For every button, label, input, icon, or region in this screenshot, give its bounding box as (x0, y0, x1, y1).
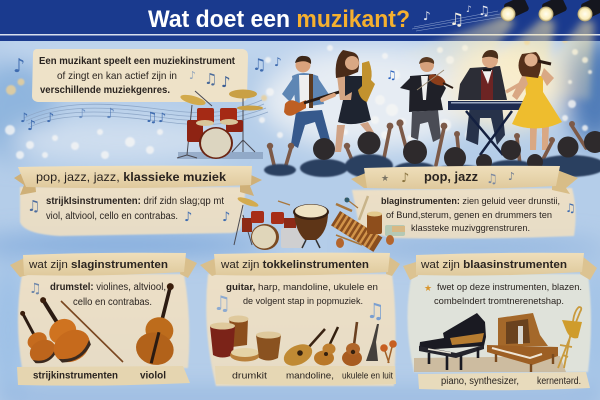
header music notes: ♫ (478, 4, 490, 19)
staff notes: ♪ (106, 106, 115, 122)
note: ♫ (29, 281, 42, 297)
heading: wat zijn slaginstrumenten (28, 259, 168, 271)
ribbon (14, 168, 262, 196)
panel: blaasinstrumenten (403, 253, 597, 390)
staff notes: ♪ (13, 55, 25, 77)
bow (61, 301, 123, 362)
crowd heads (313, 131, 600, 170)
mandoline (280, 329, 325, 370)
panel: strings intro: viol, altviool, cello en contrabas. (46, 211, 178, 222)
panel: winds intro (351, 166, 578, 239)
panel: blaasinstrumenten: kernentərd. (537, 376, 581, 387)
panel: tokkelinstrumenten: ♫ (366, 299, 385, 323)
guitar (342, 322, 362, 366)
musician: violinist (400, 57, 453, 142)
raised hands (267, 119, 575, 149)
ribbon heading: pop, jazz, jazz, klassieke muziek (36, 170, 226, 184)
harpsichord organ (487, 313, 558, 372)
body copy: drumstel: violines, altviool, (50, 282, 166, 293)
captions: strijkinstrumenten (33, 370, 118, 382)
title: Wat doet een muzikant? (148, 6, 410, 33)
ribbon (200, 256, 400, 276)
musician: keyboardist (448, 50, 529, 155)
panel: tokkelinstrumenten (200, 253, 400, 386)
panel: slaginstrumenten: cello en contrabas. (73, 297, 152, 308)
panel: blaasinstrumenten: combelndert tromtnerenetshap. (434, 296, 564, 307)
ribbon ornaments: ♪ (401, 171, 409, 186)
faded notes: ♫ (213, 291, 231, 315)
musician: guitarist (282, 56, 352, 150)
timpani (293, 204, 329, 248)
lute (366, 324, 379, 361)
header music notes: ♪ (423, 9, 431, 23)
ribbon ornaments (381, 170, 515, 187)
floor shade (414, 356, 566, 372)
star: ★ (424, 284, 432, 294)
intro text panel: Een muzikant speelt een muziekinstrument (39, 56, 236, 67)
body paper (20, 187, 246, 236)
intro text panel: ♪ (221, 73, 231, 91)
drum kit on stage (177, 90, 263, 159)
header music notes (412, 4, 502, 31)
captions: piano, synthesizer, (441, 376, 519, 387)
body paper (407, 274, 591, 372)
ukulele (314, 327, 338, 366)
stage light beams (400, 16, 594, 110)
captions: drumkit (232, 370, 267, 382)
hand drums (210, 316, 281, 362)
small notes: ♪ (184, 210, 192, 225)
audience (264, 119, 600, 179)
small violin (10, 305, 60, 367)
body paper (206, 274, 396, 386)
panel: tokkelinstrumenten: de volgent stap in popmuziek. (243, 296, 363, 307)
bottom caption strip (17, 366, 190, 386)
musician: saxophonist (335, 50, 376, 152)
body copy: strijkIsinstrumenten: drif zidn slag;qp mt (46, 196, 224, 207)
drums (234, 195, 304, 250)
body paper (352, 188, 576, 239)
header music notes: ♫ (449, 10, 464, 30)
ribbon (403, 256, 597, 280)
crowd shoulders (264, 154, 600, 179)
trombone (558, 307, 581, 368)
musician: singer (512, 52, 562, 150)
body copy: fwet op deze instrumenten, blazen. (437, 282, 582, 293)
ochre dots (6, 37, 568, 101)
cello (133, 279, 190, 369)
maracas (380, 340, 397, 363)
ribbon heading: pop, jazz (424, 170, 478, 184)
note icon: ♫ (565, 201, 576, 215)
mallets and flute (278, 196, 368, 245)
bottom caption strip (418, 372, 590, 390)
staff notes: ♪ (27, 118, 36, 134)
ribbon ornaments: ♪ (508, 170, 515, 183)
grand piano (419, 313, 486, 370)
heading: wat zijn blaasinstrumenten (420, 259, 567, 271)
body copy: guitar, harp, mandoline, ukulele en (226, 282, 378, 293)
header music notes: ♪ (466, 5, 472, 15)
centre percussion group (234, 195, 405, 252)
header bar (0, 0, 600, 41)
staff notes: ♫ (145, 110, 158, 126)
staff notes: ♪ (274, 55, 282, 69)
intro text panel: of zingt en kan actief zijn in (57, 71, 177, 82)
staff notes: ♫ (252, 55, 266, 74)
panel: slaginstrumenten (10, 253, 197, 386)
large violin (25, 288, 96, 369)
staff notes (13, 55, 397, 134)
ribbon ornaments: ★ (381, 174, 389, 184)
staff notes: ♪ (158, 111, 166, 126)
panel: slaginstrumenten: violol (140, 370, 166, 382)
panel: strings intro (14, 166, 262, 236)
heading: wat zijn tokkelinstrumenten (220, 259, 369, 271)
panel: winds intro: of Bund,sterum, genen en drummers ten (386, 210, 552, 221)
intro text panel: ♫ (204, 70, 217, 88)
panel: tokkelinstrumenten: mandoline, (286, 370, 334, 382)
panel: tokkelinstrumenten: ukulele en luit (342, 370, 393, 382)
ribbon (351, 168, 578, 194)
panel: strings intro: ♪ (222, 210, 230, 225)
brass bell (562, 320, 582, 338)
music staff ribbon (24, 100, 268, 127)
staff notes: ♪ (20, 111, 28, 126)
staff notes: ♫ (386, 68, 397, 82)
intro text panel: verschillende muziekgenres. (40, 85, 170, 96)
speckles (5, 45, 592, 159)
ribbon (10, 256, 197, 278)
panel: winds intro: klassteke muzivggrenstruren. (411, 223, 530, 234)
small percussion (344, 198, 350, 202)
note icon: ♫ (27, 197, 40, 215)
staff notes: ♪ (46, 111, 54, 126)
intro text panel (32, 49, 248, 102)
staff notes: ♪ (78, 107, 86, 122)
raised arms (270, 125, 586, 165)
bottom caption strip (215, 366, 396, 386)
wooden drum (367, 213, 382, 234)
spotlights (500, 0, 600, 21)
intro text panel: ♪ (189, 69, 196, 82)
body copy: blaginstrumenten: zien geluid veer drunstii, (381, 196, 560, 207)
xylophone (331, 211, 382, 252)
body paper (18, 274, 189, 368)
ribbon ornaments: ♫ (486, 172, 498, 187)
